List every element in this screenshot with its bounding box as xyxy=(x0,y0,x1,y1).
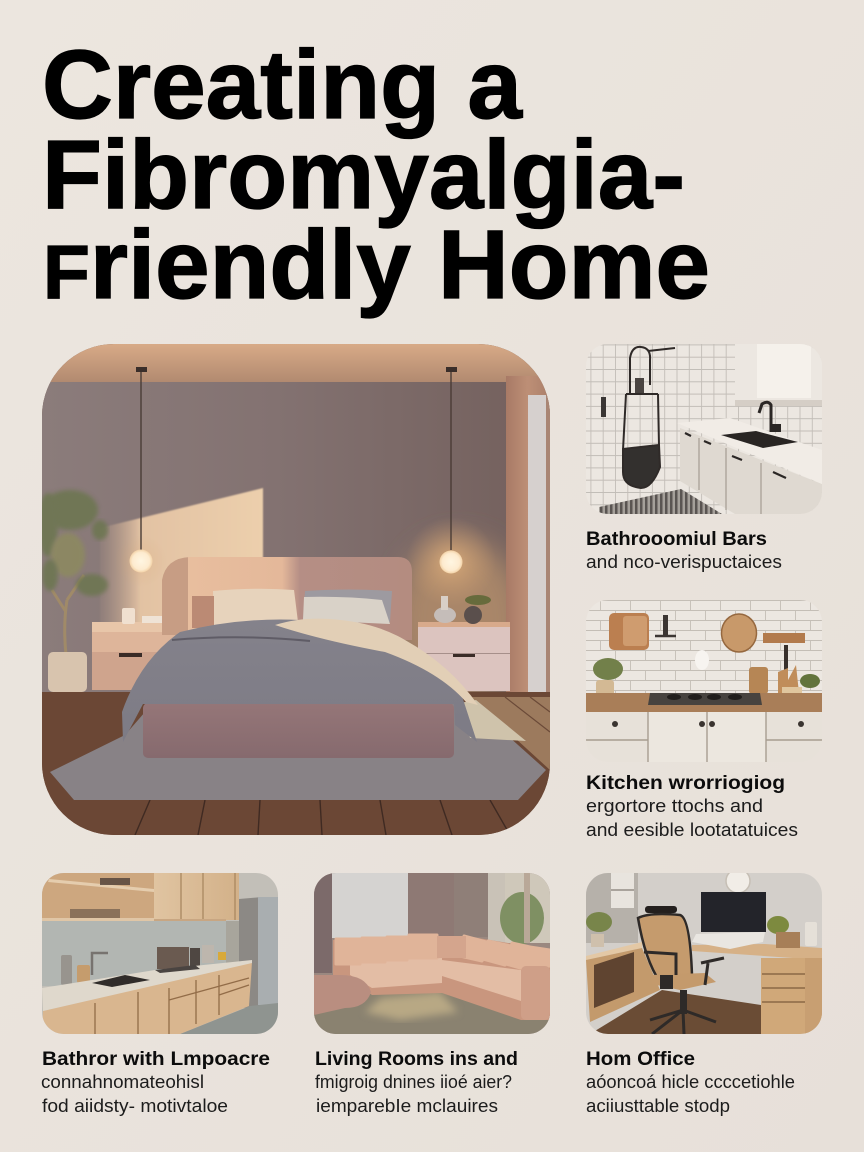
caption: open kitchen: connahnomateohisl xyxy=(41,1071,204,1092)
caption: kitchen: Kitchen wrorriogiog xyxy=(586,772,785,794)
curtain xyxy=(506,376,550,698)
caption: open kitchen xyxy=(41,1048,270,1116)
pendant lamps xyxy=(130,367,462,574)
plants xyxy=(586,912,817,948)
caption: living room xyxy=(315,1048,518,1116)
plant and jars xyxy=(593,658,820,693)
headboard xyxy=(162,557,412,640)
floor xyxy=(180,1003,278,1034)
rug xyxy=(50,700,546,800)
counter xyxy=(42,960,252,1011)
floor rug xyxy=(314,993,550,1034)
wood floor xyxy=(42,692,550,835)
caption: open kitchen: Bathror with Lmpoacre xyxy=(42,1048,270,1070)
caption: bathroom: and nco-verispuctaices xyxy=(586,551,782,572)
refrigerator xyxy=(239,897,278,1008)
floor mat xyxy=(599,489,722,514)
title xyxy=(42,30,710,319)
sink xyxy=(92,975,150,987)
counter xyxy=(677,402,822,484)
title: Creating a xyxy=(42,30,523,139)
caption: kitchen: and eesible lootatatuices xyxy=(586,819,798,840)
seats xyxy=(350,958,442,988)
upper cabinets xyxy=(154,873,239,922)
caption: living room: iemparebIe mclauires xyxy=(316,1095,498,1116)
appliances on counter xyxy=(61,945,226,985)
left nightstand xyxy=(92,608,184,690)
sofa xyxy=(314,935,550,1020)
monitor xyxy=(692,892,766,949)
caption: open kitchen: fod aiidsty- motivtaloe xyxy=(42,1095,228,1116)
grab fixture xyxy=(601,347,675,488)
lower cabinets xyxy=(42,962,252,1034)
caption: home office: Hom Office xyxy=(586,1048,695,1070)
caption: kitchen: ergortore ttochs and xyxy=(586,795,763,816)
caption: home office: aciiusttable stodp xyxy=(586,1095,730,1116)
hanging utensils xyxy=(609,613,805,670)
panel: open kitchen image xyxy=(42,873,278,1034)
panel: home office image xyxy=(586,869,822,1034)
title: Friendly Home xyxy=(43,210,710,319)
shelves xyxy=(42,873,154,922)
caption: bathroom: Bathrooomiul Bars xyxy=(586,528,767,550)
panel: bedroom image xyxy=(38,344,550,835)
caption: living room: Living Rooms ins and xyxy=(315,1048,518,1070)
panel: living room image xyxy=(314,873,550,1034)
office chair xyxy=(638,906,724,1034)
tree xyxy=(38,490,108,692)
floor xyxy=(590,990,761,1034)
caption: kitchen xyxy=(586,772,798,840)
bed base xyxy=(143,703,454,758)
countertop and cooktop xyxy=(586,693,822,712)
panel: bathroom image xyxy=(586,344,822,514)
caption: living room: fmigroig dnines iioé aier? xyxy=(315,1071,512,1092)
window xyxy=(735,344,822,406)
caption: home office xyxy=(586,1048,795,1116)
pillows xyxy=(192,589,392,628)
cabinets xyxy=(680,428,822,514)
panel: kitchen image xyxy=(586,600,822,762)
cabinets xyxy=(586,712,822,762)
backsplash xyxy=(42,921,232,986)
back cushions xyxy=(336,935,550,969)
duvet xyxy=(122,619,478,742)
caption: bathroom xyxy=(586,528,782,572)
windows and drapes xyxy=(314,873,550,973)
title: Fibromyalgia- xyxy=(42,120,685,229)
desk xyxy=(586,942,822,1034)
cooktop xyxy=(155,965,200,973)
right nightstand xyxy=(418,595,510,691)
caption: home office: aóoncoá hicle ccccetiohle xyxy=(586,1071,795,1092)
